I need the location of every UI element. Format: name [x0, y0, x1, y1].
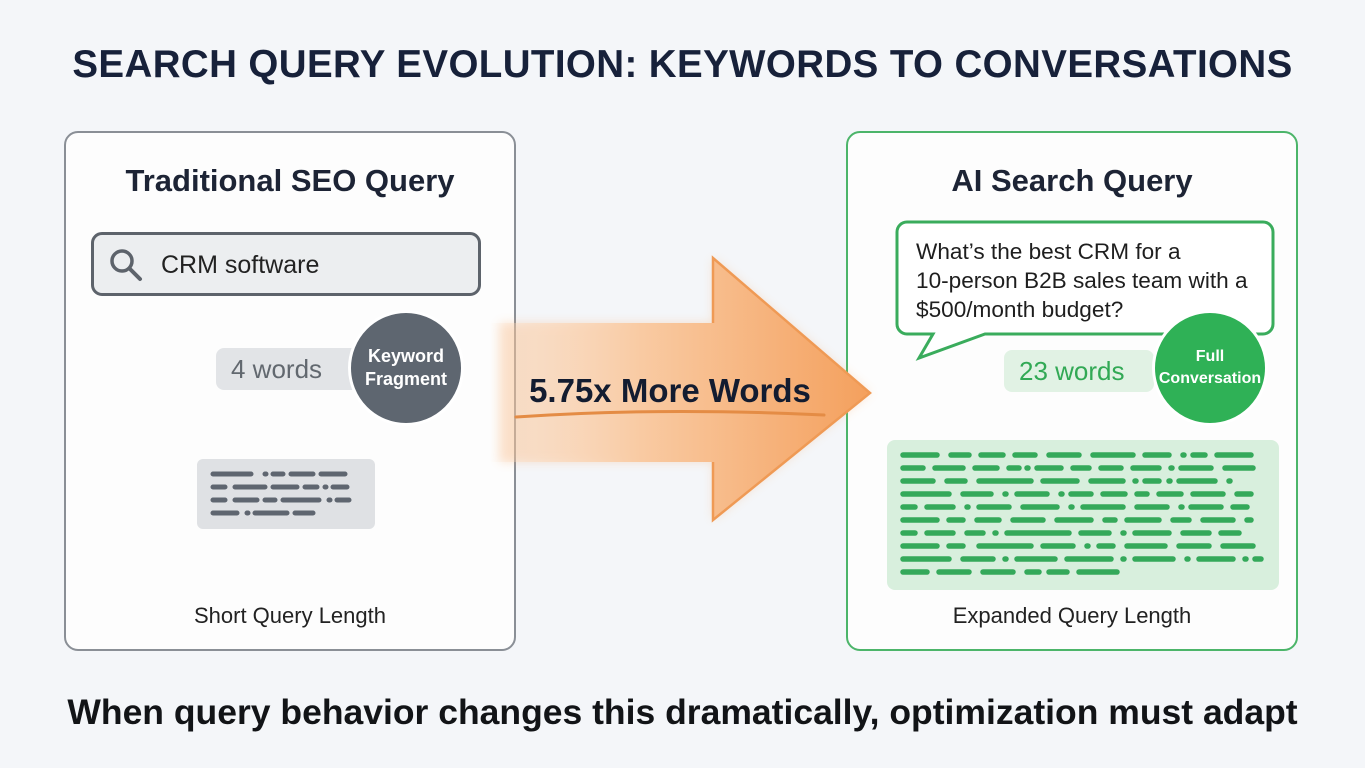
panel: traditional SEO [64, 131, 516, 651]
query text: CRM software [161, 251, 319, 279]
heading: traditional: Traditional SEO Query [125, 163, 455, 198]
question text: What’s the best CRM for a [916, 239, 1181, 264]
word count pill: 4 words [231, 354, 322, 384]
badge: keyword fragment [348, 310, 464, 426]
caption: short: Short Query Length [194, 603, 386, 628]
badge: full conversation: Conversation [1159, 370, 1261, 387]
search box [91, 232, 481, 296]
badge: keyword fragment: Keyword [368, 346, 444, 366]
arrow: 5.75x more words [494, 255, 872, 523]
question text [916, 239, 1248, 322]
speech bubble [896, 220, 1274, 361]
word count pill: 23 words [1019, 356, 1124, 386]
text lines block [887, 440, 1279, 590]
badge: full conversation [1152, 310, 1268, 426]
text lines icon [197, 459, 375, 529]
arrow label: 5.75x More Words [529, 372, 811, 409]
panel: AI search [846, 131, 1298, 651]
question text: 10-person B2B sales team with a [916, 268, 1248, 293]
caption: expanded: Expanded Query Length [953, 603, 1191, 628]
icon: magnifier [110, 249, 142, 282]
heading: AI: AI Search Query [951, 163, 1193, 198]
question text: $500/month budget? [916, 297, 1123, 322]
word count pill [216, 348, 366, 390]
word count pill [1004, 350, 1154, 392]
title: SEARCH QUERY EVOLUTION: KEYWORDS TO CONVERSATIONS [72, 43, 1293, 86]
badge: keyword fragment: Fragment [365, 369, 447, 389]
footer message: When query behavior changes this dramatically, optimization must adapt [67, 692, 1298, 732]
badge: full conversation: Full [1196, 348, 1224, 365]
